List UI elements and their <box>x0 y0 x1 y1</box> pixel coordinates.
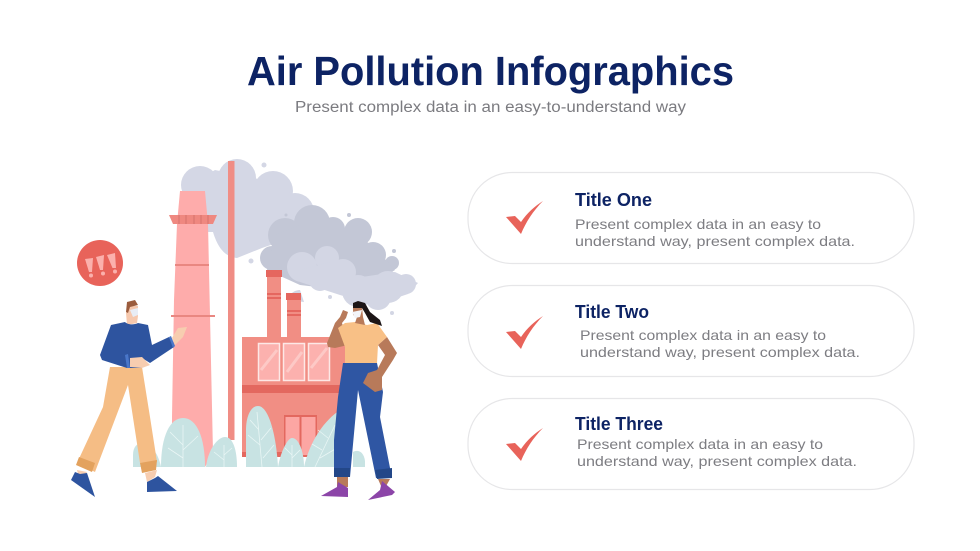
face mask <box>130 308 138 317</box>
ankles <box>337 477 390 488</box>
factory building <box>242 270 350 457</box>
body text: understand way, present complex data. <box>580 344 860 360</box>
heading: Title One <box>575 190 652 210</box>
raised arm <box>327 310 348 348</box>
card: title two <box>468 286 914 376</box>
light smoke cloud front <box>287 246 418 315</box>
jeans <box>334 363 392 478</box>
man with mask <box>71 300 187 497</box>
title: Air Pollution Infographics <box>247 48 734 94</box>
arm on hip <box>363 337 397 392</box>
card: title three <box>468 398 914 490</box>
icon: check mark <box>506 428 543 461</box>
tall smokestack <box>169 191 217 467</box>
body text: understand way, present complex data. <box>575 233 855 249</box>
body text: Present complex data in an easy to <box>577 436 823 452</box>
illustration: factory pollution scene <box>71 159 418 500</box>
hair <box>126 300 138 313</box>
icon: check mark <box>506 201 543 234</box>
hair <box>353 301 382 326</box>
woman with mask <box>321 301 397 500</box>
neck and face <box>353 307 365 325</box>
body text: Present complex data in an easy to <box>580 327 826 343</box>
shoes <box>321 482 348 497</box>
light smoke cloud behind pole <box>181 159 314 264</box>
bushes <box>133 406 365 467</box>
shoes <box>71 472 95 497</box>
mask <box>352 310 362 318</box>
vertical pole <box>228 161 234 440</box>
heading: Title Three <box>575 414 663 434</box>
sweater <box>100 322 174 368</box>
neck and face <box>126 306 138 325</box>
trousers <box>77 367 157 472</box>
icon: check mark <box>506 316 543 349</box>
shirt <box>338 322 387 363</box>
icon: alert bubble <box>77 240 123 286</box>
body text: understand way, present complex data. <box>577 453 857 469</box>
card: title one <box>468 172 914 264</box>
hands <box>172 327 187 345</box>
subtitle: Present complex data in an easy-to-understand way <box>295 99 686 116</box>
body text: Present complex data in an easy to <box>575 216 821 232</box>
dark smoke cloud <box>260 205 399 292</box>
heading: Title Two <box>575 302 649 322</box>
